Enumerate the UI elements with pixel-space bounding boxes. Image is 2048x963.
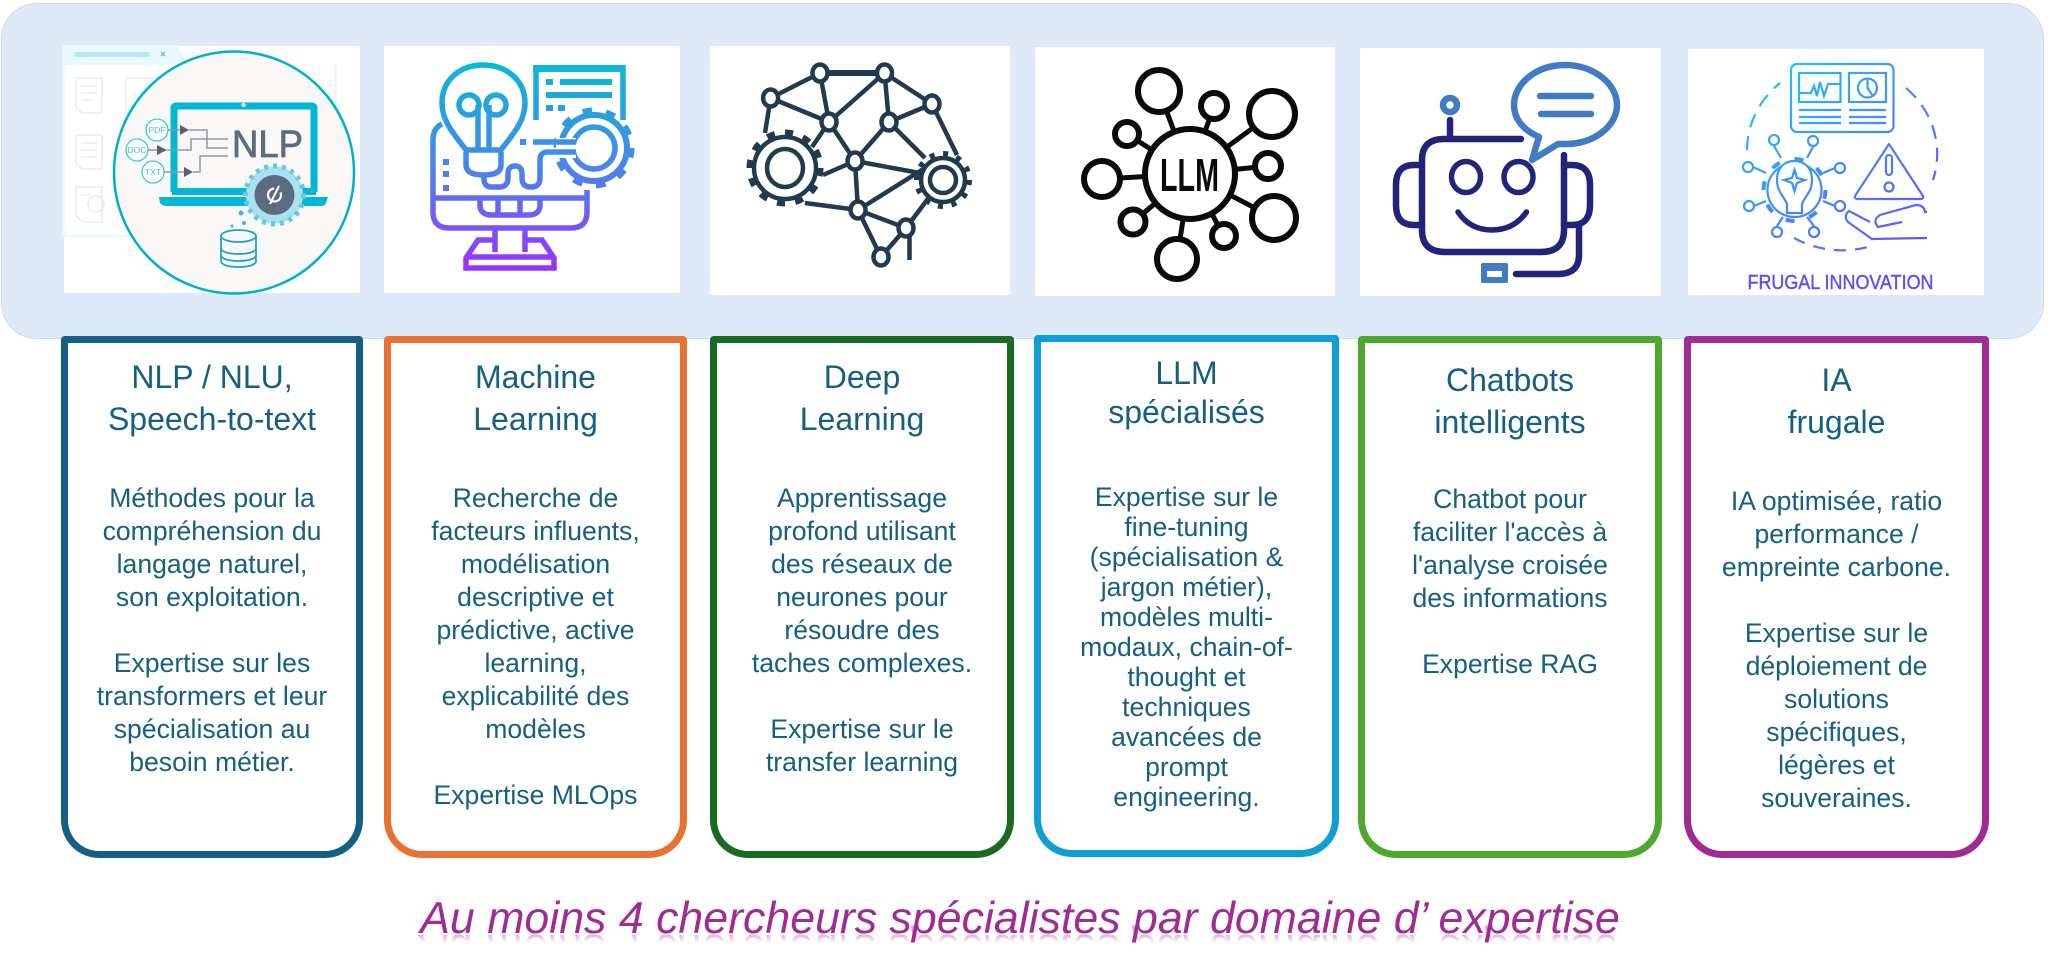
- text: IA frugale description: souveraines.: [1761, 783, 1912, 813]
- text: Deep Learning description: résoudre des: [784, 615, 940, 645]
- text: LLM description: prompt: [1145, 752, 1228, 782]
- text: Machine Learning description: modélisation: [461, 549, 610, 579]
- heading: NLP: [108, 359, 316, 437]
- text: NLP description: [97, 483, 327, 777]
- icon: LLM hub: [1084, 70, 1296, 279]
- text: Machine Learning description: descriptive et: [457, 582, 614, 612]
- heading: Deep Learning: [800, 359, 924, 437]
- text: LLM description: avancées de: [1111, 722, 1262, 752]
- text: Machine Learning description: explicabilité des: [442, 681, 629, 711]
- text: LLM description: modaux, chain-of-: [1080, 632, 1293, 662]
- image tile: IA frugale: [1688, 49, 1984, 295]
- text: LLM description: fine-tuning: [1124, 512, 1249, 542]
- text: NLP description: spécialisation au: [114, 714, 310, 744]
- footer caption: Au moins 4 chercheurs spécialistes par domaine d’ expertise: [420, 894, 1620, 943]
- text: IA frugale description: Expertise sur le: [1745, 618, 1928, 648]
- card: Chatbots intelligents: [1358, 336, 1662, 858]
- heading: IA frugale: IA: [1821, 362, 1852, 398]
- text: NLP description: besoin métier.: [129, 747, 295, 777]
- text: Machine Learning description: modèles: [485, 714, 586, 744]
- heading: IA frugale: frugale: [1788, 404, 1885, 440]
- text: Deep Learning description: des réseaux de: [771, 549, 953, 579]
- text: NLP description: transformers et leur: [97, 681, 327, 711]
- text: Machine Learning description: learning,: [484, 648, 586, 678]
- text: IA frugale description: empreinte carbone.: [1722, 552, 1951, 582]
- text: Deep Learning description: [752, 483, 972, 777]
- icon: Machine Learning bulb, gear and monitor: [433, 65, 631, 268]
- text: IA frugale description: spécifiques,: [1766, 717, 1907, 747]
- text: NLP description: son exploitation.: [116, 582, 308, 612]
- text: Machine Learning description: Expertise MLOps: [434, 780, 637, 810]
- text: NLP description: langage naturel,: [117, 549, 307, 579]
- text: Deep Learning description: Apprentissage: [777, 483, 947, 513]
- text: LLM description: [1080, 482, 1293, 812]
- card: LLM spécialisés: [1034, 335, 1339, 857]
- text: LLM description: modèles multi-: [1100, 602, 1273, 632]
- text: Machine Learning description: facteurs influents,: [431, 516, 640, 546]
- heading: Machine Learning: Machine: [475, 359, 596, 395]
- icon: NLP laptop in circle: PDF: [148, 125, 166, 135]
- icon: Deep Learning neural brain: [750, 64, 969, 266]
- text: Machine Learning description: Recherche de: [453, 483, 618, 513]
- text: IA frugale description: légères et: [1778, 750, 1895, 780]
- text: IA frugale description: performance /: [1754, 519, 1919, 549]
- text: LLM description: techniques: [1122, 692, 1251, 722]
- text: NLP description: Expertise sur les: [114, 648, 310, 678]
- heading: NLP: Speech-to-text: [108, 401, 316, 437]
- heading: Chatbots: intelligents: [1434, 404, 1586, 440]
- text: Chatbots description: faciliter l'accès à: [1413, 517, 1607, 547]
- image tile: LLM: [1035, 47, 1335, 296]
- heading: LLM: spécialisés: [1108, 394, 1265, 430]
- text: Deep Learning description: profond utilisant: [768, 516, 956, 546]
- text: Machine Learning description: [431, 483, 640, 810]
- heading: Machine Learning: [473, 359, 598, 437]
- text: LLM description: Expertise sur le: [1095, 482, 1278, 512]
- heading: Machine Learning: Learning: [473, 401, 598, 437]
- heading: LLM: [1108, 355, 1265, 430]
- text: LLM description: thought et: [1127, 662, 1246, 692]
- icon: NLP laptop in circle: DOC: [128, 145, 146, 155]
- card: NLP / NLU: [61, 336, 363, 858]
- icon: LLM hub: LLM: [1160, 149, 1219, 201]
- icon: NLP laptop in circle: NLP: [232, 124, 303, 166]
- text: Deep Learning description: neurones pour: [776, 582, 948, 612]
- text: LLM description: (spécialisation &: [1090, 542, 1283, 572]
- icon: chatbot robot with speech bubble: [1396, 65, 1617, 283]
- text: Deep Learning description: Expertise sur le: [770, 714, 954, 744]
- heading: Chatbots: Chatbots: [1446, 362, 1574, 398]
- icon: frugal innovation: [1743, 64, 1937, 294]
- text: IA frugale description: [1722, 486, 1951, 813]
- text: Deep Learning description: transfer learning: [766, 747, 958, 777]
- panel: icon band: [1, 3, 2044, 339]
- text: LLM description: engineering.: [1113, 782, 1260, 812]
- icon: frugal innovation: FRUGAL INNOVATION: [1748, 271, 1934, 294]
- text: IA frugale description: IA optimisée, ratio: [1731, 486, 1942, 516]
- text: NLP description: Méthodes pour la: [109, 483, 315, 513]
- text: Deep Learning description: taches complexes.: [752, 648, 972, 678]
- text: Chatbots description: des informations: [1412, 583, 1608, 613]
- text: LLM description: jargon métier),: [1101, 572, 1272, 602]
- heading: LLM: LLM: [1155, 355, 1218, 391]
- image tile: Deep Learning: [710, 46, 1010, 295]
- image tile: Machine Learning: [384, 46, 680, 293]
- icon: NLP laptop in circle: TXT: [145, 167, 161, 177]
- text: IA frugale description: solutions: [1784, 684, 1889, 714]
- text: Chatbots description: [1412, 484, 1608, 679]
- text: NLP description: compréhension du: [103, 516, 321, 546]
- card: Deep Learning: [710, 336, 1014, 858]
- icon: NLP laptop in circle: [62, 45, 354, 294]
- heading: NLP: NLP / NLU,: [131, 359, 293, 395]
- text: Chatbots description: Expertise RAG: [1422, 649, 1598, 679]
- image tile: NLP: [64, 46, 360, 293]
- image tile: Chatbots: [1360, 48, 1661, 296]
- text: Chatbots description: l'analyse croisée: [1412, 550, 1608, 580]
- heading: IA frugale: [1788, 362, 1885, 440]
- text: Chatbots description: Chatbot pour: [1433, 484, 1587, 514]
- card: IA frugale: [1684, 336, 1989, 858]
- text: Machine Learning description: prédictive, active: [436, 615, 635, 645]
- card: Machine Learning: [384, 336, 687, 858]
- heading: Deep Learning: Deep: [824, 359, 900, 395]
- text: IA frugale description: déploiement de: [1746, 651, 1927, 681]
- heading: Chatbots: [1434, 362, 1586, 440]
- heading: Deep Learning: Learning: [800, 401, 924, 437]
